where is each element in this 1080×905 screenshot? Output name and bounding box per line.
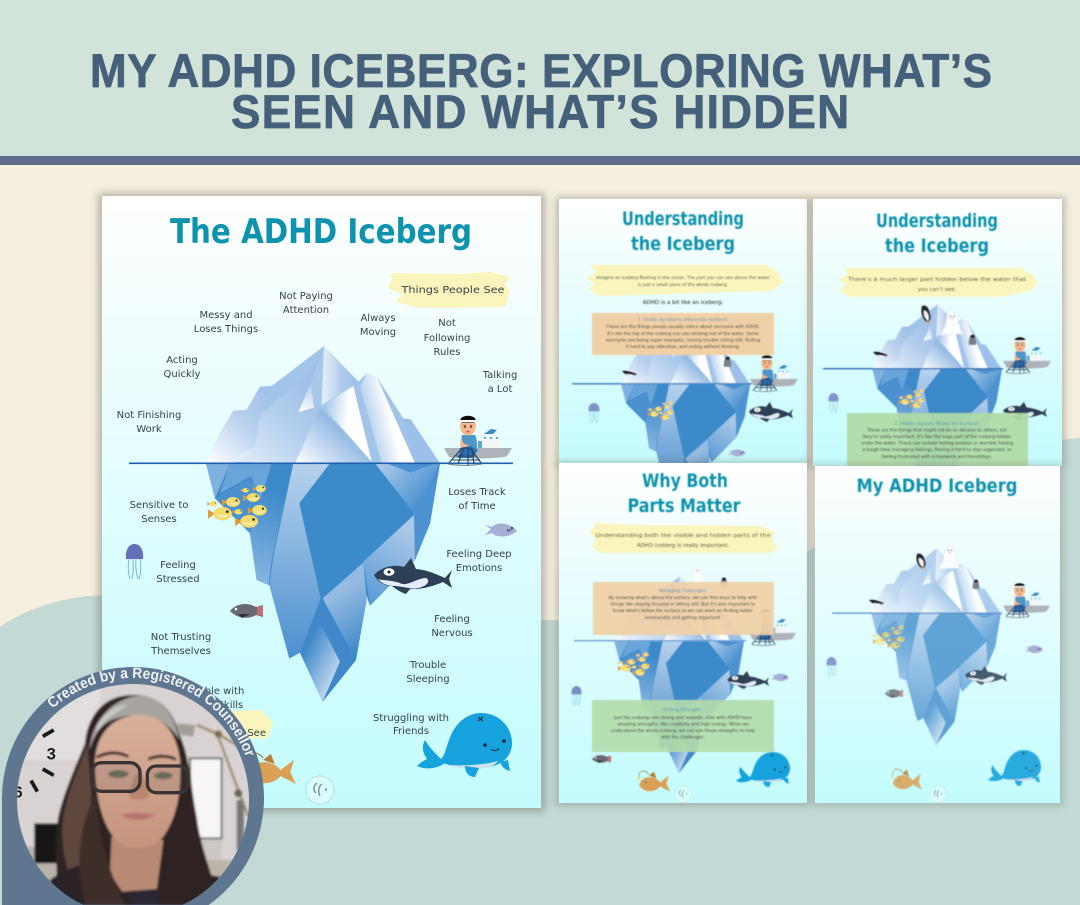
- icon: blue whale: [417, 713, 512, 777]
- icon: jellyfish: [126, 544, 143, 579]
- glasses: [92, 763, 188, 793]
- panel: understanding the iceberg, hidden aspects: a tough time managing feelings, finding it hard to stay organized, or: [862, 447, 1012, 453]
- visible traits labels: Messy and: [199, 310, 253, 321]
- panel: my ADHD iceberg: My ADHD Iceberg: [856, 475, 1018, 497]
- badge: counsellor portrait: [2, 667, 264, 905]
- hidden traits labels: Emotions: [456, 563, 502, 574]
- panel: my ADHD iceberg: [812, 464, 1063, 806]
- panel: understanding the iceberg, visible symptoms: examples are being super energetic, having trouble sitting still, finding: [606, 338, 760, 344]
- hidden traits labels: Trouble: [409, 660, 446, 671]
- panel: understanding the iceberg, hidden aspects: These are the things that might not be as obvious to others, but: [866, 428, 1007, 434]
- panel: understanding the iceberg, hidden aspects: Understanding: [876, 210, 998, 232]
- panel: understanding the iceberg, visible symptoms: the Iceberg: [631, 233, 735, 255]
- panel: understanding the iceberg, hidden aspects: 2. Hidden Aspects (Below the Surface):: [894, 421, 980, 427]
- visible traits labels: Rules: [434, 347, 460, 358]
- hidden traits labels: Friends: [393, 726, 429, 737]
- panel: understanding the iceberg, visible symptoms: 1. Visible Symptoms (Above the Surface):: [638, 317, 728, 323]
- panel: why both parts matter: [556, 461, 810, 806]
- panel: understanding the iceberg, hidden aspects: they're really important. It's like the huge part of the iceberg hidden: [863, 434, 1012, 440]
- panel: understanding the iceberg, hidden aspects: under the water. These can include feeling anxious or worried, having: [861, 440, 1013, 446]
- highlight: things people see: Things People See: [400, 285, 504, 296]
- visible traits labels: a Lot: [488, 384, 512, 395]
- icon: yellow fish school: [207, 485, 267, 528]
- visible traits labels: Quickly: [164, 369, 201, 380]
- main title: SEEN AND WHAT’S HIDDEN: [231, 86, 849, 138]
- visible traits labels: Acting: [166, 355, 198, 366]
- panel: understanding the iceberg, hidden aspects: [810, 197, 1065, 501]
- hidden traits labels: Feeling Deep: [446, 549, 512, 560]
- panel: why both parts matter: understand the whole iceberg, we can use these strengths to help: [611, 728, 755, 734]
- hidden traits labels: Senses: [141, 514, 177, 525]
- highlight: things people don't see: Things People Don’t See: [143, 728, 266, 739]
- visible traits labels: Not Finishing: [117, 410, 181, 421]
- main title: [90, 45, 992, 138]
- wall clock: [17, 728, 56, 798]
- hidden traits labels: Sensitive to: [130, 500, 188, 511]
- panel: why both parts matter: with the challenges.: [661, 734, 705, 740]
- panel: understanding the iceberg, visible symptoms: Imagine an iceberg floating in the ocean. The part you can see above the water: [596, 275, 770, 281]
- panel: why both parts matter: ADHD iceberg is really important.: [637, 543, 729, 549]
- hidden traits labels: Social Skills: [185, 700, 243, 711]
- panel: why both parts matter: Why Both: [642, 470, 728, 492]
- visible traits labels: Work: [136, 424, 162, 435]
- panel title: The ADHD Iceberg: [170, 212, 472, 252]
- visible traits labels: [117, 291, 517, 435]
- icon: logo: [306, 776, 334, 804]
- main title: MY ADHD ICEBERG: EXPLORING WHAT’S: [90, 45, 992, 97]
- iceberg: [205, 346, 440, 702]
- panel: understanding the iceberg, visible symptoms: ADHD is a bit like an iceberg:: [643, 300, 723, 306]
- badge ring: [2, 667, 264, 905]
- visible traits labels: Talking: [482, 370, 517, 381]
- badge caption: Created by a Registered Counsellor: [48, 668, 254, 755]
- hidden traits labels: Nervous: [431, 628, 473, 639]
- visible traits labels: Loses Things: [194, 324, 258, 335]
- panel: understanding the iceberg, hidden aspects: feeling frustrated with schoolwork and friendships.: [882, 454, 992, 460]
- visible traits labels: Always: [360, 313, 396, 324]
- visible traits labels: Following: [424, 333, 470, 344]
- icon: anglerfish: [245, 753, 296, 784]
- panel: why both parts matter: Finding Strengths:: [663, 707, 703, 713]
- hidden traits labels: Feeling: [434, 614, 470, 625]
- hidden traits labels: Struggling with: [373, 713, 449, 724]
- water line: [129, 462, 513, 464]
- panel: understanding the iceberg, visible symptoms: [552, 193, 813, 470]
- panel: understanding the iceberg, hidden aspects: you can't see.: [918, 287, 957, 293]
- icon: grey fish: [230, 604, 263, 618]
- panel: understanding the iceberg, hidden aspects: There's a much larger part hidden below the water that: [847, 277, 1027, 283]
- hidden traits labels: Feeling: [160, 560, 196, 571]
- hidden traits labels: [130, 487, 512, 737]
- panel: why both parts matter: Just like icebergs are strong and majestic, kids with ADHD have: [613, 715, 752, 721]
- panel: why both parts matter: know what's below the surface so we can work on finding better: [613, 608, 753, 614]
- hidden traits labels: of Time: [458, 501, 496, 512]
- panel: the ADHD iceberg: [98, 193, 545, 812]
- visible traits labels: Attention: [283, 305, 329, 316]
- panel: understanding the iceberg, hidden aspects: the Iceberg: [885, 235, 989, 257]
- panel: why both parts matter: Managing Challenges:: [659, 588, 707, 594]
- panel: why both parts matter: By knowing what's above the surface, we can find ways to help with: [609, 595, 758, 601]
- panel: understanding the iceberg, visible symptoms: It's like the top of the iceberg you see sticking out of the water. Some: [607, 331, 759, 337]
- panel: understanding the iceberg, visible symptoms: These are the things people usually notice about someone with ADHD.: [605, 324, 760, 330]
- panel: why both parts matter: Understanding both the visible and hidden parts of the: [596, 533, 771, 539]
- panel: understanding the iceberg, visible symptoms: is just a small piece of the whole iceberg.: [638, 282, 728, 288]
- icon: killer whale: [374, 558, 452, 594]
- wall clock: 6: [14, 784, 23, 801]
- highlight: things people see: [388, 272, 510, 308]
- wall clock: 3: [47, 744, 56, 763]
- panel: why both parts matter: emotionally and getting organized.: [645, 615, 721, 621]
- panel: understanding the iceberg, visible symptoms: Understanding: [622, 208, 744, 230]
- hidden traits labels: Stressed: [156, 574, 200, 585]
- panel: why both parts matter: Parts Matter: [628, 495, 741, 517]
- panel: why both parts matter: amazing strengths, like creativity and high energy. When we: [617, 722, 749, 728]
- hidden traits labels: Sleeping: [406, 674, 450, 685]
- portrait: [17, 684, 249, 905]
- visible traits labels: Moving: [360, 327, 396, 338]
- icon: fisherman in boat: [444, 416, 512, 466]
- visible traits labels: Not Paying: [279, 291, 333, 302]
- hidden traits labels: Themselves: [150, 646, 211, 657]
- hidden traits labels: Trouble with: [183, 686, 244, 697]
- visible traits labels: Not: [438, 318, 456, 329]
- panel: understanding the iceberg, visible symptoms: it hard to pay attention, and acting without thinking.: [626, 344, 740, 350]
- panel: why both parts matter: things like staying focused or sitting still. But it's also important to: [611, 602, 756, 608]
- icon: purple fish: [485, 524, 517, 537]
- hidden traits labels: Not Trusting: [151, 632, 211, 643]
- hidden traits labels: Loses Track: [448, 487, 506, 498]
- highlight: things people don't see: [143, 710, 273, 742]
